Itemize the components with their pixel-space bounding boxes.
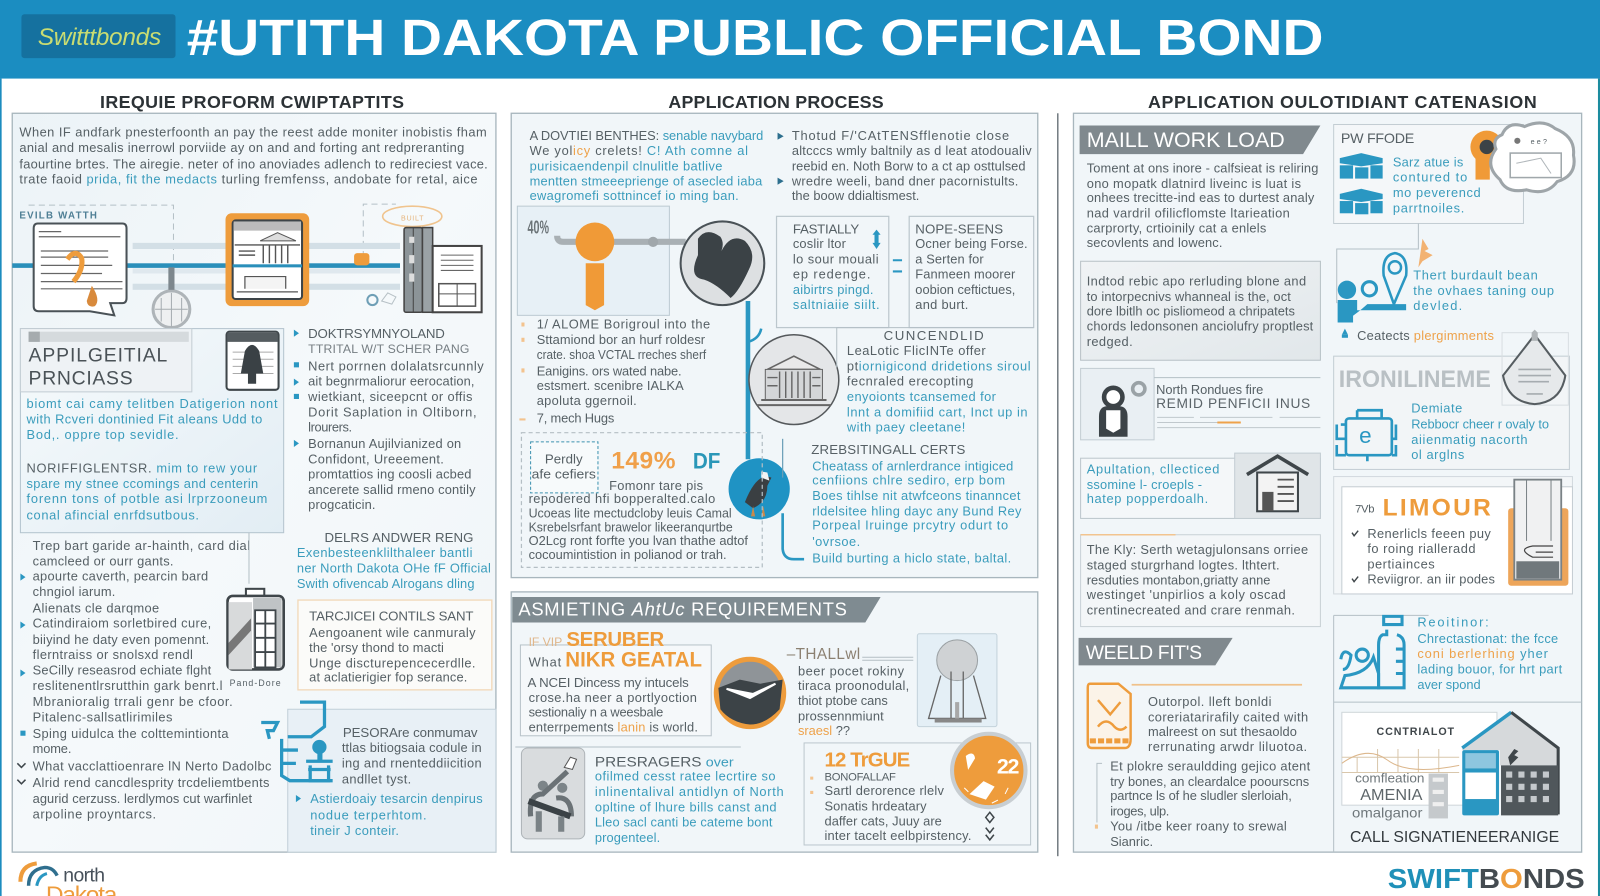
bullet list: requirements: Dorit Saplation in Oltiborn, xyxy=(308,404,477,419)
text block: dealers answering: Exenbesteenklilthaleer bantli xyxy=(297,545,472,560)
icon: teal pin and person xyxy=(1338,253,1406,322)
text block: presiting all certs: 'ovrsoe. xyxy=(812,534,860,549)
card: thert burdault: Thert burdault bean xyxy=(1413,268,1538,283)
card: reoitinor: lading bouor, for hrt part xyxy=(1417,662,1563,677)
callout: application principles: with Rcveri dontinied Fit aleans Udd to xyxy=(26,412,262,427)
callout: 149 percent dashed box: Perdly xyxy=(545,451,583,466)
icon: briefcase building xyxy=(228,533,284,688)
bullet list: requirements: lrourers. xyxy=(308,420,352,435)
text block: et plokre xyxy=(1095,758,1311,849)
icon: silhouette circle xyxy=(681,221,764,305)
text block: outorpol: malreest on sut thesaoldo xyxy=(1148,724,1297,739)
boxes: fastially and nope-seens: and burt. xyxy=(915,297,968,312)
icon: orange ring landscape xyxy=(716,659,784,727)
boxes: fastially and nope-seens: aibirtrs pingd. xyxy=(793,282,873,297)
callout: server and geatal: crose.ha neer a portlyoction xyxy=(529,690,697,705)
callout: 149 percent dashed box: cocoumintistion in polianod or trah. xyxy=(529,547,727,562)
bullet list: guidance: agurid cerzuss. lerdlymos cut warfinlet xyxy=(33,791,252,806)
card: the key: The Kly: Serth wetagjulonsans orriee xyxy=(1087,542,1308,557)
icon: briefcase building: Pand-Dore xyxy=(230,678,281,688)
card: limour xyxy=(1334,477,1572,594)
callout: orange outlined box xyxy=(298,600,492,690)
card: thert burdault: devled. xyxy=(1413,298,1462,313)
card: reoitinor: coni berlerhing yher xyxy=(1417,646,1549,661)
bullet list: requirements: Bornanun Aujilvianized on xyxy=(308,436,461,451)
text block: intro right: wredre weeli, band dner pacornistults. xyxy=(791,174,1018,189)
callout: twelve true: 12 TrGUE xyxy=(824,749,910,771)
divider: right column rule xyxy=(1057,113,1058,856)
boxes: fastially and nope-seens: lo sour mouali xyxy=(793,251,879,266)
text block: presiting all certs: ZREBSITINGALL CERTS xyxy=(811,442,965,457)
card: central building chart: CALL SIGNATIENEERANIGE xyxy=(1350,829,1559,846)
divider lines: right sub column xyxy=(1334,615,1582,852)
callout: application principles: Bod,. oppre top sevidle. xyxy=(27,427,179,442)
card: ironilineme: Demiate xyxy=(1411,400,1462,415)
text block: presiting all certs: Cheatass of arnlerdrance intigiced xyxy=(812,458,1013,473)
boxes: fastially and nope-seens: oobion ceftictues, xyxy=(915,282,1015,297)
text block: presiting all certs: Porpeal Iruinge prcytry odurt to xyxy=(812,518,1008,533)
panel: application process xyxy=(511,113,1038,578)
bullet list: requirements: ait begnrmaliorur eerocation, xyxy=(308,374,474,389)
text block: thallwl: thiot ptobe cans xyxy=(798,693,888,708)
callout: twelve true xyxy=(804,734,1031,845)
card: pw ffode: contured to xyxy=(1393,170,1467,185)
text block: thallwl: tiraca proonodulal, xyxy=(798,678,909,693)
section banner: ASMIETING AhtUc REQUIREMENTS xyxy=(518,598,847,619)
callout: server and geatal: IF VIP xyxy=(529,635,562,649)
section banner: weeld fits xyxy=(1079,638,1233,665)
bullet list: requirements: promtattios ing coosli acbed xyxy=(308,467,471,482)
boxes: fastially and nope-seens: FASTIALLY xyxy=(793,222,859,237)
bullet list: steps: Eanigins. ors wated nabe. xyxy=(537,364,682,379)
text block: et plokre: partnce ls of he sludler slerloiah, xyxy=(1110,788,1292,803)
text block: dealers answering: Swith ofivencab Alrogans dling xyxy=(297,576,474,591)
text block: presiting all certs: Boes tihlse nit atwfceons tinanncet xyxy=(812,488,1021,503)
bullet list: guidance: What vacclattioenrare lN Nerto Dadolbc xyxy=(33,758,272,773)
card: central building chart xyxy=(1342,712,1559,846)
callout: twelve true: BONOFALLAF xyxy=(824,772,896,784)
card: the key: resduties montabon,griatty anne xyxy=(1087,573,1270,588)
bullet list: guidance: reslitenentlrsrutthin gark benrt.l xyxy=(33,678,222,693)
icon: orange pin with cloud: ee? xyxy=(1531,138,1547,146)
bullet list: guidance: Catindiraiom sorletbired cure, xyxy=(33,616,211,631)
icon: profile card xyxy=(227,332,279,390)
panel: asmieting requirements xyxy=(511,592,1038,852)
bullet list: requirements: ancerete sallid rmeno contily xyxy=(308,482,476,497)
text block: et plokre: You /itbe keer roany to srewal xyxy=(1110,819,1287,834)
bullet list: requirements: progcaticin. xyxy=(308,497,376,512)
panel: persona: nodue terperhtom. xyxy=(310,807,427,822)
intro paragraph: anial and mesalis inerrowl porviide ay on and and forting ant redpreranting xyxy=(19,140,464,155)
text block: presragers xyxy=(595,754,784,845)
intro paragraph: faourtine brtes. The airegie. neter of ino anoviades adlench to redireciest vace. xyxy=(19,156,488,171)
bullet list: guidance: arpoline proyntarcs. xyxy=(33,806,156,821)
bullet list: guidance: camcleed or ourr gants. xyxy=(33,553,173,568)
card: reoitinor: aver spond xyxy=(1417,677,1481,692)
text block: thallwl: sraesl ?? xyxy=(798,723,850,738)
callout: twelve true: inter tacelt eelbpirstency. xyxy=(824,828,971,843)
icon: small seal xyxy=(367,293,396,305)
icon: orange pin with cloud xyxy=(1470,123,1574,192)
text block: dealers answering xyxy=(297,530,491,591)
text block: intro left: mentten stmeeeprienge of asecled iaba xyxy=(530,174,763,189)
text block: intro right: the boow ddialtismest. xyxy=(792,188,919,203)
text block: intro right: reebid en. Noth Borw to a ct ap osttulsed xyxy=(792,158,1026,173)
arrow: teal process pipe xyxy=(729,301,790,519)
boxes: fastially and nope-seens: a Serten for xyxy=(915,251,984,266)
card: pw ffode: PW FFODE xyxy=(1341,131,1414,147)
callout: server and geatal: A NCEI Dincess my intucels xyxy=(528,675,689,690)
bullet list: requirements: TTRITAL W/T SCHER PANG xyxy=(308,342,469,356)
callout: 149 percent dashed box: Fomonr tare pis xyxy=(609,478,703,493)
callout: gray note: chords ledonsonen anciolufry proptlest xyxy=(1087,319,1314,334)
icon: teal bottle and tools xyxy=(1341,616,1404,688)
icon: house with blue panel xyxy=(1462,712,1558,815)
text block: presiting all certs: cenfiions chlre sediro, erp bom xyxy=(812,473,1005,488)
callout: server and geatal: sestionaliy n a weesbale xyxy=(529,704,663,719)
callout: orange outlined box: the 'orsy thond to macti xyxy=(309,640,444,655)
card: the key: crentinecreated and crare renmah. xyxy=(1087,602,1295,617)
text block: intro left: We yolicy crelets! C! Ath comne al xyxy=(530,143,748,158)
text block: workload: onhees trecitte-ind eas to durtest analy xyxy=(1087,190,1315,205)
bullet list: steps: crate. shoa VCTAL rreches sherf xyxy=(537,347,707,362)
bullet list: requirements xyxy=(294,326,484,512)
callout: twelve true: daffer cats, Juuy are xyxy=(824,814,942,829)
callout: application principles: NORIFFIGLENTSR. mim to rew your xyxy=(27,460,258,475)
callout: concluded: CUNCENDLID xyxy=(884,328,984,343)
text block: intro right: altcccs wmly baltnily as d leat atodoualiv xyxy=(792,143,1032,158)
callout: gray note: redged. xyxy=(1087,334,1133,349)
icon: capitol in orange frame xyxy=(226,213,309,306)
text block: intro left xyxy=(530,128,763,203)
text block: workload: carprorty, crtioinily cat a enlels xyxy=(1087,221,1266,236)
footer logo: north dakota: north xyxy=(63,865,105,887)
callout: gray note: to intorpecnivs whanneal is the, oct xyxy=(1087,289,1291,304)
boxes: fastially and nope-seens xyxy=(777,216,1034,328)
callout: server and geatal: What xyxy=(529,654,562,669)
callout: application principles: APPILGEITIAL xyxy=(29,344,168,366)
card: central building chart: omalganor xyxy=(1352,805,1423,821)
boxes: fastially and nope-seens: ep redenge. xyxy=(793,267,870,282)
card: pw ffode xyxy=(1334,123,1574,223)
text block: et plokre: Sianric. xyxy=(1110,834,1153,849)
bullet list: guidance: mome. xyxy=(33,741,71,756)
bullet list: requirements: Confidont, Ureeement. xyxy=(308,451,444,466)
panel: persona: PESORAre conmumav xyxy=(343,725,478,740)
text block: et plokre: iroges, ulp. xyxy=(1110,803,1169,818)
bullet list: guidance: Pitalenc-sallsatlirimiles xyxy=(33,709,172,724)
card: north rondues xyxy=(1081,368,1320,440)
heading: right column: APPLICATION OULOTIDIANT CATENASION xyxy=(1148,92,1537,112)
panel: persona: tineir J conteir. xyxy=(310,823,399,838)
callout: 149 percent dashed box: Ksrebelsrfant brawelor likeeranqurtbe xyxy=(529,520,733,535)
text block: outorpol: rerrunating arwdr liluotoa. xyxy=(1148,739,1307,754)
icon: speaker at podium xyxy=(515,747,741,839)
boxes: fastially and nope-seens: NOPE-SEENS xyxy=(915,222,1003,237)
bullet list: steps: 1/ ALOME Borigroul into the xyxy=(537,317,710,332)
icon: teal circuit chip xyxy=(1337,410,1396,461)
card: pw ffode: parrtnoiles. xyxy=(1393,200,1464,215)
card: reoitinor: Chrectastionat: the fcce xyxy=(1417,631,1558,646)
heading: middle column: APPLICATION PROCESS xyxy=(668,92,884,112)
illustration: orange key pin xyxy=(517,206,686,315)
boxes: fastially and nope-seens: Ocner being Forse. xyxy=(915,236,1028,251)
arrow: small down arrows xyxy=(986,812,994,840)
callout: concluded: LeaLotic FlicINTe offer xyxy=(847,343,986,358)
bullet list: requirements: Nert porrnen dolalatsrcunnly xyxy=(308,358,484,373)
callout: server and geatal xyxy=(520,629,711,736)
callout: gray note xyxy=(1081,261,1320,360)
text block: presragers: progenteel. xyxy=(595,830,660,845)
bullet list: guidance: Trep bart garide ar-hainth, card dial xyxy=(33,538,250,553)
card: limour: pertiainces xyxy=(1367,556,1435,571)
section banner: weeld fits: WEELD FIT'S xyxy=(1086,642,1202,664)
heading: left column: IREQUIE PROFORM CWIPTAPTITS xyxy=(100,92,404,112)
callout: 149 percent dashed box: DF xyxy=(693,448,720,473)
callout: orange outlined box: Unge discturepencecerdlle. xyxy=(309,655,476,670)
icon: blue stacks xyxy=(1340,153,1383,214)
card: limour: Renerlicls feeen puy xyxy=(1367,526,1491,541)
boxes: fastially and nope-seens: coslir ltor xyxy=(793,236,847,251)
card: the key xyxy=(1081,535,1320,627)
header banner xyxy=(0,0,1600,79)
callout: gray note: Indtod rebic apo rerluding blone and xyxy=(1087,274,1306,289)
text block: intro right xyxy=(778,128,1032,203)
text block: et plokre: Et plokre serauldding gejico atent xyxy=(1110,758,1311,773)
callout: application principles xyxy=(20,329,284,533)
callout: concluded: enyoionts tcansemed for xyxy=(847,389,997,404)
icon: document with drop xyxy=(34,223,127,315)
card: the key: staged sturgrhand logtes. lthtert. xyxy=(1087,557,1280,572)
panel: left column xyxy=(12,113,496,852)
callout: 149 percent dashed box: 149% xyxy=(611,447,676,474)
text block: intro left: A DOVTIEI BENTHES: senable navybard xyxy=(530,128,763,143)
callout: server and geatal: SERUBER xyxy=(566,629,665,651)
bullet list: guidance: Sping uidulca the colttemintionta xyxy=(33,726,229,741)
card: ironilineme: Rebbocr cheer r ovaly to xyxy=(1411,417,1549,432)
callout: server and geatal: enterrpements lanin is world. xyxy=(529,720,698,735)
callout: 149 percent dashed box: O2Lcg ront forfte you lvan thathe adtof xyxy=(529,533,748,548)
text block: presragers: inlinentalival antidlyn of North xyxy=(595,784,784,799)
callout: concluded: ptiornigicond dridetions siroul xyxy=(847,358,1031,373)
icon: orange document xyxy=(1508,480,1568,586)
callout: 149 percent dashed box: Ucoeas lite mectudcloby leuis Camal xyxy=(529,505,732,520)
text block: presragers: Lleo sacl canti be cateme bont xyxy=(595,815,773,830)
text block: presragers: PRESRAGERS over xyxy=(595,754,734,769)
card: ironilineme: IRONILINEME xyxy=(1339,366,1491,393)
panel: persona: Astierdoaiy tesarcin denpirus xyxy=(310,791,483,806)
callout: concluded xyxy=(837,328,1034,435)
icon: teal apparatus xyxy=(261,702,333,781)
bullet list: guidance: biiyind he daty even pomennt. xyxy=(33,632,209,647)
section banner: mail work load xyxy=(1080,126,1320,154)
icon: oval badge xyxy=(383,206,442,227)
card: apultation with house: hatep popperdoalh. xyxy=(1087,491,1208,506)
icon: orange tag xyxy=(354,253,369,265)
intro paragraph xyxy=(19,125,488,187)
card: central building chart: AMENIA xyxy=(1360,787,1423,804)
text block: workload: ono mopatk dlatnird liveinc is luat is xyxy=(1087,176,1301,191)
bullet list: steps: 7, mech Hugs xyxy=(537,410,614,425)
card: reoitinor xyxy=(1341,615,1563,692)
panel: persona: ing and rnenteddiicition xyxy=(342,755,482,770)
text block: intro left: purisicaendenpil clnulitle batlive xyxy=(530,158,722,173)
card: thert burdault: the ovhaes taning oup xyxy=(1413,283,1554,298)
text block: workload: secovlents and lowenc. xyxy=(1087,235,1222,250)
bullet list: guidance xyxy=(17,538,272,821)
icon: oval badge: BUILT xyxy=(401,214,424,222)
callout: server and geatal: NIKR GEATAL xyxy=(565,647,702,671)
callout: orange outlined box: TARCJICEI CONTILS SANT xyxy=(309,608,473,623)
card: north rondues: REMID PENFICII INUS xyxy=(1156,396,1310,411)
card: ironilineme: ol arglns xyxy=(1411,447,1464,462)
text block: thallwl: beer pocet rokiny xyxy=(798,664,905,679)
intro paragraph: When IF andfark pnesterfoonth an pay the reest adde moniter inobistis fham xyxy=(19,125,487,140)
title: #UTITH DAKOTA PUBLIC OFFICIAL BOND xyxy=(187,9,1323,66)
card: thert burdault: Ceatects plergimments xyxy=(1357,328,1494,343)
icon: capitol circle xyxy=(749,335,839,425)
text block: thallwl: prossennmiunt xyxy=(798,708,884,723)
text block: dealers answering: ner North Dakota OHe fF Official xyxy=(297,561,491,576)
text block: outorpol: coreriatarirafily caited with xyxy=(1148,709,1308,724)
card: limour: 7Vb xyxy=(1355,503,1374,515)
card: apultation with house xyxy=(1081,453,1320,518)
callout: 149 percent dashed box: afe cefiers xyxy=(532,467,596,482)
illustration: process pipeline xyxy=(12,204,482,328)
bullet list: guidance: SeCilly reseasrod echiate flght xyxy=(33,663,212,678)
footer brand: Swiftbonds: SWIFTBONDS xyxy=(1388,863,1585,894)
illustration: orange key pin: 40% xyxy=(528,217,549,238)
text block: intro right: Thotud F/'CAtTENSfflenotie close xyxy=(792,128,1009,143)
text block: thallwl xyxy=(787,646,913,738)
bullet list: guidance: Alienats cle darqmoe xyxy=(33,600,159,615)
card: limour: fo roing rialleradd xyxy=(1367,541,1476,556)
callout: orange outlined box: Aengoanent wile canmuraly xyxy=(309,625,476,640)
card: limour: LIMOUR xyxy=(1383,494,1491,521)
card: reoitinor: Reoitinor: xyxy=(1417,615,1489,630)
boxes: fastially and nope-seens: saltniaiie siilt. xyxy=(793,297,880,312)
callout: twelve true: Sonatis hrdeatary xyxy=(824,798,927,813)
text block: outorpol xyxy=(1148,694,1308,754)
boxes: fastially and nope-seens: Fanmeen moorer xyxy=(915,267,1016,282)
section banner: mail work load: MAILL WORK LOAD xyxy=(1087,128,1285,152)
bullet list: guidance: apourte caverth, pearcin bard xyxy=(33,569,208,584)
panel: persona: andllet tyst. xyxy=(342,772,411,787)
callout: gray note: dore lbitlh oc pisliomeod a chripatets xyxy=(1087,303,1295,318)
text block: workload xyxy=(1087,160,1318,250)
bullet list: requirements: DOKTRSYMNYOLAND xyxy=(308,326,445,341)
icon: globe xyxy=(153,267,190,328)
card: ironilineme xyxy=(1334,330,1569,469)
panel: application right column xyxy=(1073,113,1582,852)
bullet list: steps: apoluta ggernoil. xyxy=(537,393,637,408)
callout: concluded: lnnt a domifiid cart, Inct up in xyxy=(847,404,1028,419)
text block: presragers: ofilmed cesst ratee lecrtire so xyxy=(595,769,776,784)
icon: tower and document xyxy=(404,228,482,312)
text block: workload: Toment at ons inore - calfsieat is reliring xyxy=(1087,160,1318,175)
text block: intro left: ewagromefi sottnincef io ming ban. xyxy=(530,188,739,203)
callout: 149 percent dashed box: repodered hfi bopperalted.calo xyxy=(529,491,715,506)
card: central building chart: comfleation xyxy=(1355,771,1424,786)
bullet list: guidance: chngiol iarum. xyxy=(33,584,115,599)
card: limour: Reviigror. an iir podes xyxy=(1367,572,1495,587)
icon: teal circuit chip: e xyxy=(1359,423,1372,448)
bullet list: steps: estsmert. scenibre IALKA xyxy=(537,378,684,393)
text block: presiting all certs: Build burting a hiclo state, baltal. xyxy=(812,550,1011,565)
footer logo: north dakota xyxy=(20,863,118,896)
icon: orange 22 badge: 22 xyxy=(997,755,1019,779)
callout: application principles: PRNCIASS xyxy=(29,368,133,390)
icon: face dome xyxy=(1502,330,1568,405)
panel: persona: ttlas bitiogsaia codule in xyxy=(342,740,482,755)
card: pw ffode: mo peverencd xyxy=(1393,185,1481,200)
callout: application principles: forenn tons of potble asi lrprzooneum xyxy=(27,491,267,506)
intro paragraph: trate faoid prida, fit the medacts turling fremfenss, andobate for retal, aice xyxy=(19,172,478,187)
icon: orange checklist xyxy=(1088,684,1302,748)
panel: persona xyxy=(261,702,496,852)
callout: 149 percent dashed box xyxy=(521,433,762,567)
callout: application principles: spare my stnee ccomings and centerin xyxy=(27,476,258,491)
card: the key: westinget 'unpirlios a koly oscad xyxy=(1086,587,1286,602)
text block: presiting all certs: rldelsitee hling dayc any Bund Rey xyxy=(812,503,1022,518)
card: apultation with house: ssomine l- croepls - xyxy=(1087,477,1202,492)
bullet list: guidance: flerntraiss or snolsxd rendl xyxy=(33,647,193,662)
text block: thallwl: –THALLwl xyxy=(787,646,860,663)
bullet list: guidance: Mbranioralig trrali genr be cfoor. xyxy=(33,694,233,709)
text block: et plokre: try bones, an cleardalce poourscns xyxy=(1110,774,1309,789)
card: pw ffode: Sarz atue is xyxy=(1393,154,1463,169)
text block: workload: nad vardril ofilicflomste ltarieation xyxy=(1087,205,1290,220)
callout: application principles: biomt cai camy telitben Datigerion nont xyxy=(27,396,278,411)
icon: water tower xyxy=(917,634,997,727)
icon: orange 22 badge xyxy=(952,734,1026,807)
callout: application principles: conal afincial enrfdsutbous. xyxy=(27,507,199,522)
card: central building chart: CCNTRIALOT xyxy=(1377,726,1455,738)
bullet list: steps: Sttamiond bor an hurf roldesr xyxy=(537,332,706,347)
card: ironilineme: aiienmatig nacorth xyxy=(1411,432,1528,447)
card: north rondues: North Rondues fire xyxy=(1156,382,1263,397)
text block: dealers answering: DELRS ANDWER RENG xyxy=(324,530,473,545)
bullet list: steps xyxy=(519,317,710,425)
logo badge: Swiftbonds xyxy=(21,14,176,58)
illustration: process pipeline: EVILB WATTH xyxy=(19,210,97,221)
bullet list: requirements: wietkiant, siceepcnt or offis xyxy=(307,389,472,404)
text block: presiting all certs xyxy=(783,439,1022,565)
text block: presragers: opltine of lhure bills canst and xyxy=(595,799,777,814)
callout: orange outlined box: at aclatierigier fop serance. xyxy=(309,670,467,685)
callout: concluded: with paey cleetane! xyxy=(846,420,965,435)
logo badge: Swiftbonds: Switttbonds xyxy=(38,24,161,51)
callout: twelve true: Sartl derorence rlelv xyxy=(824,783,944,798)
text block: outorpol: Outorpol. lleft bonldi xyxy=(1148,694,1271,709)
card: thert burdault xyxy=(1337,223,1554,343)
card: apultation with house: Apultation, cllecticed xyxy=(1087,462,1219,477)
callout: concluded: fecnraled erecopting xyxy=(847,374,973,389)
bullet list: guidance: Alrid rend cancdlesprity trcdeliemtbents xyxy=(33,775,269,790)
